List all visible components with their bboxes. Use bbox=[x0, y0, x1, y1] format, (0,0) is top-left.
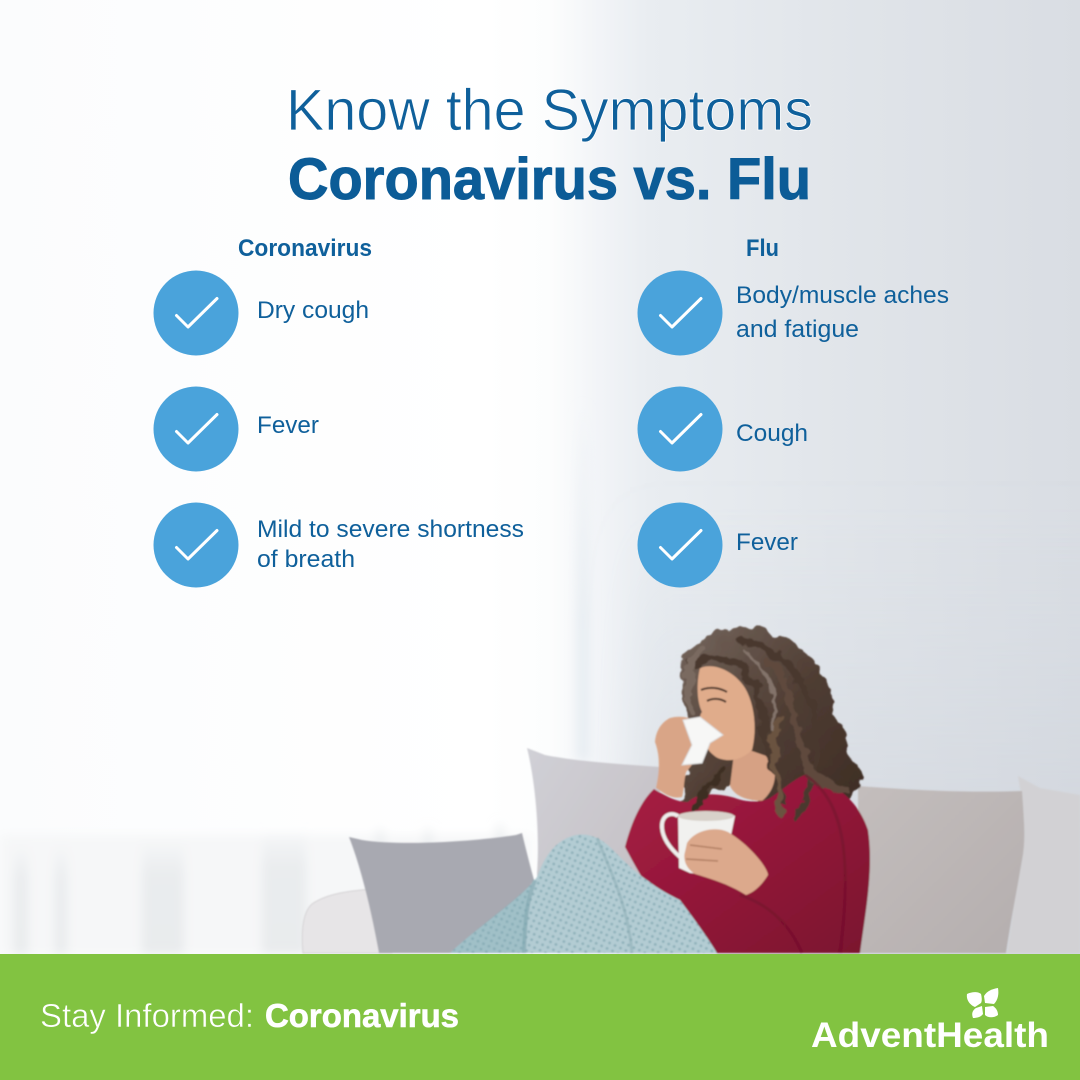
footer band bbox=[0, 954, 1080, 1080]
neck bbox=[730, 745, 775, 801]
sweater bbox=[625, 775, 870, 953]
far right pillow bbox=[1007, 776, 1080, 953]
logo: AdventHealth bbox=[811, 988, 1049, 1055]
heading: coronavirus: Coronavirus bbox=[238, 235, 372, 262]
left hand and arm bbox=[655, 717, 704, 798]
item: fever: Fever bbox=[736, 529, 798, 556]
title: Coronavirus vs. Flu bbox=[288, 147, 811, 212]
item: body aches: and fatigue bbox=[736, 316, 859, 343]
item: cough bbox=[638, 386, 808, 472]
hair front strands bbox=[688, 640, 850, 815]
item: fever bbox=[638, 502, 798, 588]
item: shortness of breath bbox=[154, 502, 524, 588]
icon: flower bbox=[967, 988, 998, 1018]
item: cough: Cough bbox=[736, 420, 808, 447]
right hand bbox=[684, 829, 768, 895]
front pillow bbox=[349, 833, 534, 953]
sofa arm bbox=[302, 889, 392, 953]
left back cushion bbox=[527, 748, 660, 953]
item: dry cough bbox=[154, 270, 369, 356]
footer text: Stay Informed: bbox=[40, 997, 254, 1034]
blanket bbox=[450, 835, 717, 953]
right back cushion bbox=[858, 786, 1024, 953]
item: fever bbox=[154, 386, 319, 472]
footer text bbox=[40, 997, 459, 1034]
photo: woman with a cold on a sofa bbox=[302, 627, 1080, 953]
heading: flu: Flu bbox=[746, 235, 779, 262]
sleeve shading bbox=[740, 775, 845, 953]
title bbox=[286, 78, 813, 212]
logo: AdventHealth: AdventHealth bbox=[811, 1016, 1049, 1055]
item: shortness of breath: of breath bbox=[257, 546, 355, 573]
hair back bbox=[680, 627, 860, 823]
eyes and brows bbox=[701, 688, 727, 702]
panel: coronavirus symptoms bbox=[154, 235, 524, 588]
item: body aches: Body/muscle aches bbox=[736, 282, 949, 309]
item: fever: Fever bbox=[257, 412, 319, 439]
footer text: Coronavirus bbox=[265, 997, 459, 1034]
item: shortness of breath: Mild to severe shortness bbox=[257, 516, 524, 543]
panel: flu symptoms bbox=[638, 235, 949, 588]
item: dry cough: Dry cough bbox=[257, 297, 369, 324]
title: Know the Symptoms bbox=[286, 78, 813, 143]
item: body aches bbox=[638, 270, 949, 356]
tissue bbox=[682, 717, 723, 765]
face bbox=[698, 666, 755, 760]
mug bbox=[662, 811, 735, 874]
